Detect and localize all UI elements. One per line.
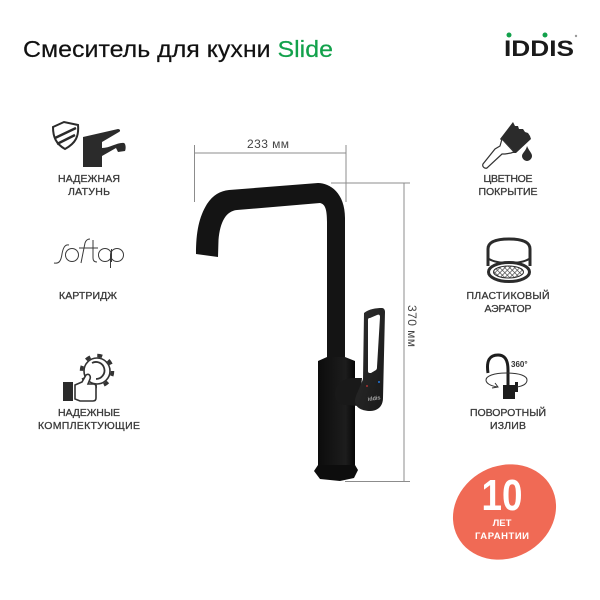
- dimension: width 233 mm: [194, 137, 346, 202]
- label: swivel spout: [470, 406, 546, 432]
- label: reliable components: КОМПЛЕКТУЮЩИЕ: [38, 420, 140, 432]
- faucet handle: [355, 308, 385, 411]
- label: plastic aerator: ПЛАСТИКОВЫЙ: [466, 289, 550, 302]
- badge: 10 year warranty: 10: [482, 471, 522, 520]
- faucet body: [318, 357, 355, 465]
- dimension: width 233 mm: 233 мм: [247, 137, 289, 151]
- faucet lever connector: [335, 378, 362, 406]
- handle details: [366, 385, 368, 387]
- label: plastic aerator: АЭРАТОР: [484, 303, 532, 315]
- badge: 10 year warranty: [436, 447, 573, 577]
- label: colored coating: [478, 173, 538, 198]
- dimension: height 370 mm: [331, 183, 419, 482]
- label: colored coating: ЦВЕТНОЕ: [484, 173, 532, 185]
- label: reliable brass: ЛАТУНЬ: [68, 186, 110, 198]
- label: plastic aerator: [466, 289, 550, 315]
- icon: swivel faucet 360: 360°: [511, 360, 528, 369]
- title: Смеситель для кухни Slide: [23, 36, 333, 62]
- faucet spout and stem: [196, 183, 345, 362]
- label: reliable brass: НАДЕЖНАЯ: [58, 173, 120, 185]
- label: reliable components: [38, 407, 140, 432]
- badge: 10 year warranty: ЛЕТ: [493, 518, 512, 529]
- icon: aerator: [488, 239, 530, 282]
- label: reliable components: НАДЕЖНЫЕ: [58, 407, 120, 419]
- icon: paint brush: [483, 122, 532, 168]
- icon: thumb and gear: [63, 356, 112, 401]
- label: swivel spout: ИЗЛИВ: [490, 420, 526, 432]
- icon: swivel faucet 360: [486, 355, 528, 399]
- faucet base: [314, 465, 358, 481]
- dimension: height 370 mm: 370 мм: [405, 305, 419, 347]
- logo: IDDIS: IDDIS: [504, 36, 574, 61]
- label: cartridge: КАРТРИДЖ: [59, 290, 117, 302]
- faucet: [196, 183, 385, 481]
- faucet: iddis: [367, 395, 381, 403]
- badge: 10 year warranty: ГАРАНТИИ: [475, 531, 529, 542]
- icon: softap logo: [54, 239, 124, 268]
- label: swivel spout: ПОВОРОТНЫЙ: [470, 406, 546, 419]
- label: colored coating: ПОКРЫТИЕ: [478, 186, 538, 198]
- label: reliable brass: [58, 173, 120, 198]
- icon: shield and tap: [53, 122, 126, 167]
